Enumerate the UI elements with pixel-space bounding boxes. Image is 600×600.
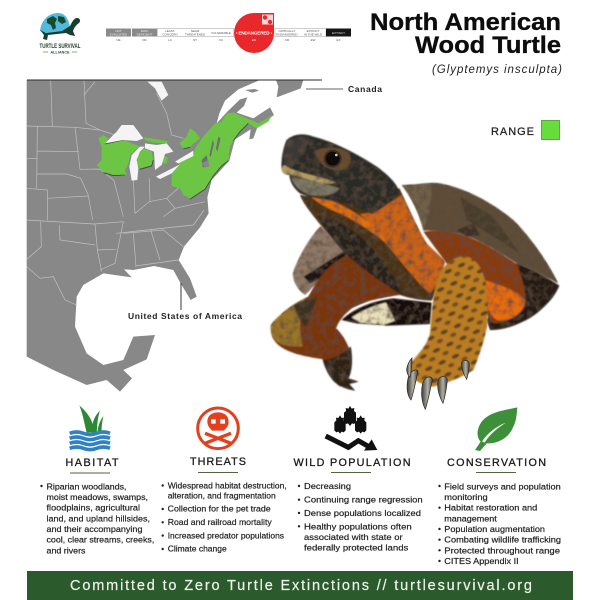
left body and leg	[271, 255, 400, 387]
borders	[27, 80, 205, 305]
label: United States of America: United States of America	[128, 311, 242, 321]
icon: conservation leaf	[475, 407, 517, 451]
conservation status scale: IN THE WILD	[304, 32, 323, 36]
range map	[27, 80, 322, 392]
claws	[407, 358, 469, 409]
conservation status scale: VULNERABLE	[211, 31, 231, 35]
label: United States of America	[128, 283, 242, 321]
text: conservation list: CITES Appendix II	[444, 556, 519, 566]
text: wild population list: Continuing range regression	[304, 495, 423, 505]
text: conservation list: Population augmentation	[444, 524, 545, 534]
text: threats list: Climate change	[168, 544, 227, 554]
text: conservation list: Habitat restoration and	[444, 503, 537, 513]
text: threats list: Increased predator populations	[168, 530, 285, 540]
conservation status scale: CONCERN	[162, 32, 178, 36]
conservation status scale: EVALUATED	[110, 32, 128, 36]
turtle eye	[324, 150, 342, 168]
logo: Turtle Survival Alliance: TURTLE SURVIVAL	[40, 43, 80, 50]
heading: wild population: WILD POPULATION	[294, 457, 410, 469]
label: Canada: Canada	[348, 84, 382, 94]
text: wild population list	[298, 481, 423, 553]
text: conservation list: management	[444, 513, 497, 523]
icon: habitat grass and water	[70, 405, 110, 450]
left shell rim	[293, 226, 349, 295]
lakes	[105, 82, 193, 181]
conservation status scale: EXTINCT	[332, 31, 345, 35]
logo: Turtle Survival Alliance: ALLIANCE	[50, 50, 70, 54]
text: conservation list: Field surveys and population	[444, 481, 561, 491]
conservation status scale: EX	[336, 38, 341, 42]
text: conservation list: monitoring	[444, 492, 488, 502]
conservation status scale: NEAR	[191, 29, 200, 33]
carapace rear dark	[487, 263, 559, 330]
turtle illustration	[271, 134, 559, 409]
text: conservation list: Combating wildlife trafficking	[444, 535, 561, 545]
underside orange	[423, 231, 525, 323]
conservation status scale: EN	[252, 38, 256, 42]
text: habitat list: floodplains, agricultural	[46, 503, 140, 513]
turtle front leg	[407, 256, 488, 387]
conservation status scale: ‹ ENDANGERED ›	[236, 30, 272, 36]
text: habitat list: land, and upland hillsides,	[46, 513, 150, 523]
land mass	[27, 80, 274, 392]
title	[370, 9, 561, 59]
text: wild population list: federally protected lands	[304, 543, 409, 553]
text: habitat list	[40, 481, 154, 555]
interior gray ridges	[202, 137, 221, 167]
text: wild population list: Healthy populations often	[304, 521, 412, 531]
text: habitat list: Riparian woodlands,	[46, 481, 127, 491]
text: habitat list: moist meadows, swamps,	[46, 492, 148, 502]
conservation status scale: EXTINCT	[307, 29, 320, 33]
conservation status scale: DD	[142, 38, 147, 42]
conservation status scale: LEAST	[165, 29, 175, 33]
title: North American	[370, 9, 561, 36]
text: threats list	[162, 480, 287, 554]
icon: threats skull and crossbones	[198, 408, 238, 449]
conservation status scale: VU	[219, 38, 223, 42]
text: conservation list	[438, 481, 561, 566]
text: conservation list: Protected throughout range	[444, 545, 560, 555]
green range	[97, 113, 273, 198]
conservation status scale: EW	[311, 38, 316, 42]
conservation status scale: NOT	[115, 29, 122, 33]
conservation status scale: DATA	[141, 29, 148, 33]
text: wild population list: Dense populations localized	[304, 508, 421, 518]
logo: Turtle Survival Alliance	[40, 13, 80, 54]
neck	[300, 188, 445, 301]
text: wild population list: associated with state or	[304, 532, 403, 542]
text: wild population list: Decreasing	[304, 481, 351, 491]
conservation status scale: ENDANGERED	[276, 32, 298, 36]
conservation status scale: CRITICALLY	[278, 29, 296, 33]
range legend: RANGE	[491, 126, 534, 138]
text: threats list: Collection for the pet trade	[168, 504, 271, 514]
conservation status scale	[106, 13, 351, 53]
heading: threats: THREATS	[190, 456, 246, 468]
conservation status scale: LC	[168, 38, 173, 42]
range legend	[491, 120, 560, 140]
title: Wood Turtle	[415, 32, 561, 59]
text: threats list: alteration, and fragmentation	[168, 490, 276, 500]
heading: habitat: HABITAT	[66, 457, 119, 469]
conservation status scale: DEFICIENT	[137, 32, 153, 36]
carapace	[402, 183, 558, 283]
conservation status scale: THREATENED	[185, 32, 206, 36]
map top rule	[27, 79, 322, 81]
footer banner	[27, 571, 573, 600]
text: threats list: Road and railroad mortality	[168, 517, 272, 527]
head	[281, 134, 399, 214]
conservation status scale: CR	[285, 38, 290, 42]
footer banner: Committed to Zero Turtle Extinctions // turtlesurvival.org	[70, 578, 532, 594]
text: threats list: Widespread habitat destruction,	[168, 480, 287, 490]
text: habitat list: and their accompanying	[46, 524, 143, 534]
text: habitat list: and rivers	[46, 545, 86, 555]
conservation status scale: NE	[116, 38, 121, 42]
text: habitat list: cool, clear streams, creeks,	[46, 535, 154, 545]
conservation status scale: NT	[193, 38, 197, 42]
icon: wild population turtles and declining arrow	[326, 406, 377, 451]
label: Canada	[306, 84, 382, 94]
heading: conservation: CONSERVATION	[447, 457, 546, 469]
scientific name: (Glyptemys insculpta)	[432, 64, 562, 76]
plastron	[342, 298, 432, 326]
